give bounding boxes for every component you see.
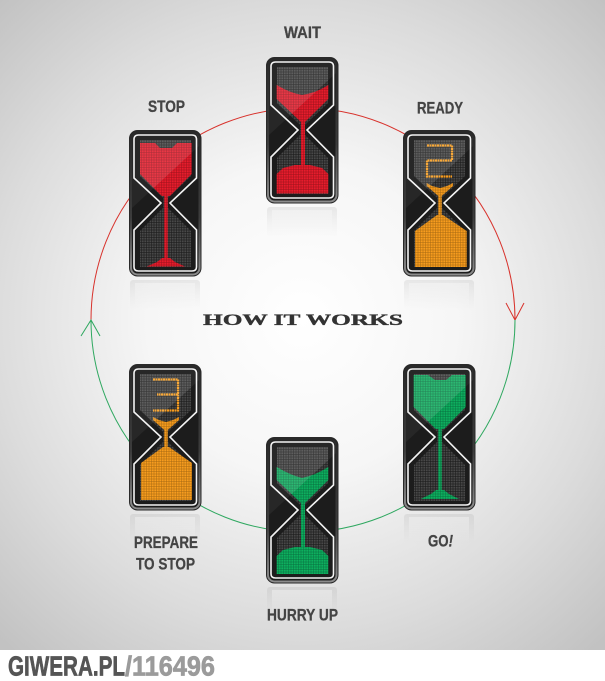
label: wait: WAIT [284, 23, 322, 42]
hourglass: prepare to stop [130, 364, 201, 544]
hourglass: stop [130, 130, 201, 310]
arrow: green arrowhead [81, 320, 100, 336]
title: HOW IT WORKS [203, 312, 403, 329]
label: go: GO! [428, 532, 453, 550]
label: stop: STOP [148, 97, 185, 116]
orange sand [141, 417, 192, 500]
hourglass: hurry up [266, 438, 338, 617]
footer strip [0, 650, 605, 681]
label: prepare to stop: PREPARE [134, 533, 198, 552]
red sand [140, 143, 192, 266]
label: prepare to stop: TO STOP [136, 554, 195, 574]
arrow: red arrowhead [506, 303, 524, 320]
hourglass: go [404, 364, 475, 544]
green sand [414, 375, 466, 499]
footer watermark: /116496 [125, 650, 215, 681]
hourglass: ready [404, 130, 475, 310]
footer watermark: GIWERA.PL [8, 650, 125, 681]
orange sand [415, 183, 467, 267]
cycle ring: green arc [81, 320, 515, 532]
green sand [277, 467, 328, 574]
label: prepare to stop [134, 533, 198, 574]
hourglass: wait [266, 58, 338, 237]
label: ready: READY [417, 98, 464, 118]
cycle ring: red arc [91, 108, 524, 320]
digit 2 [427, 146, 452, 176]
label: hurry up: HURRY UP [267, 606, 338, 624]
digit 3 [153, 380, 178, 410]
red sand [277, 85, 328, 194]
